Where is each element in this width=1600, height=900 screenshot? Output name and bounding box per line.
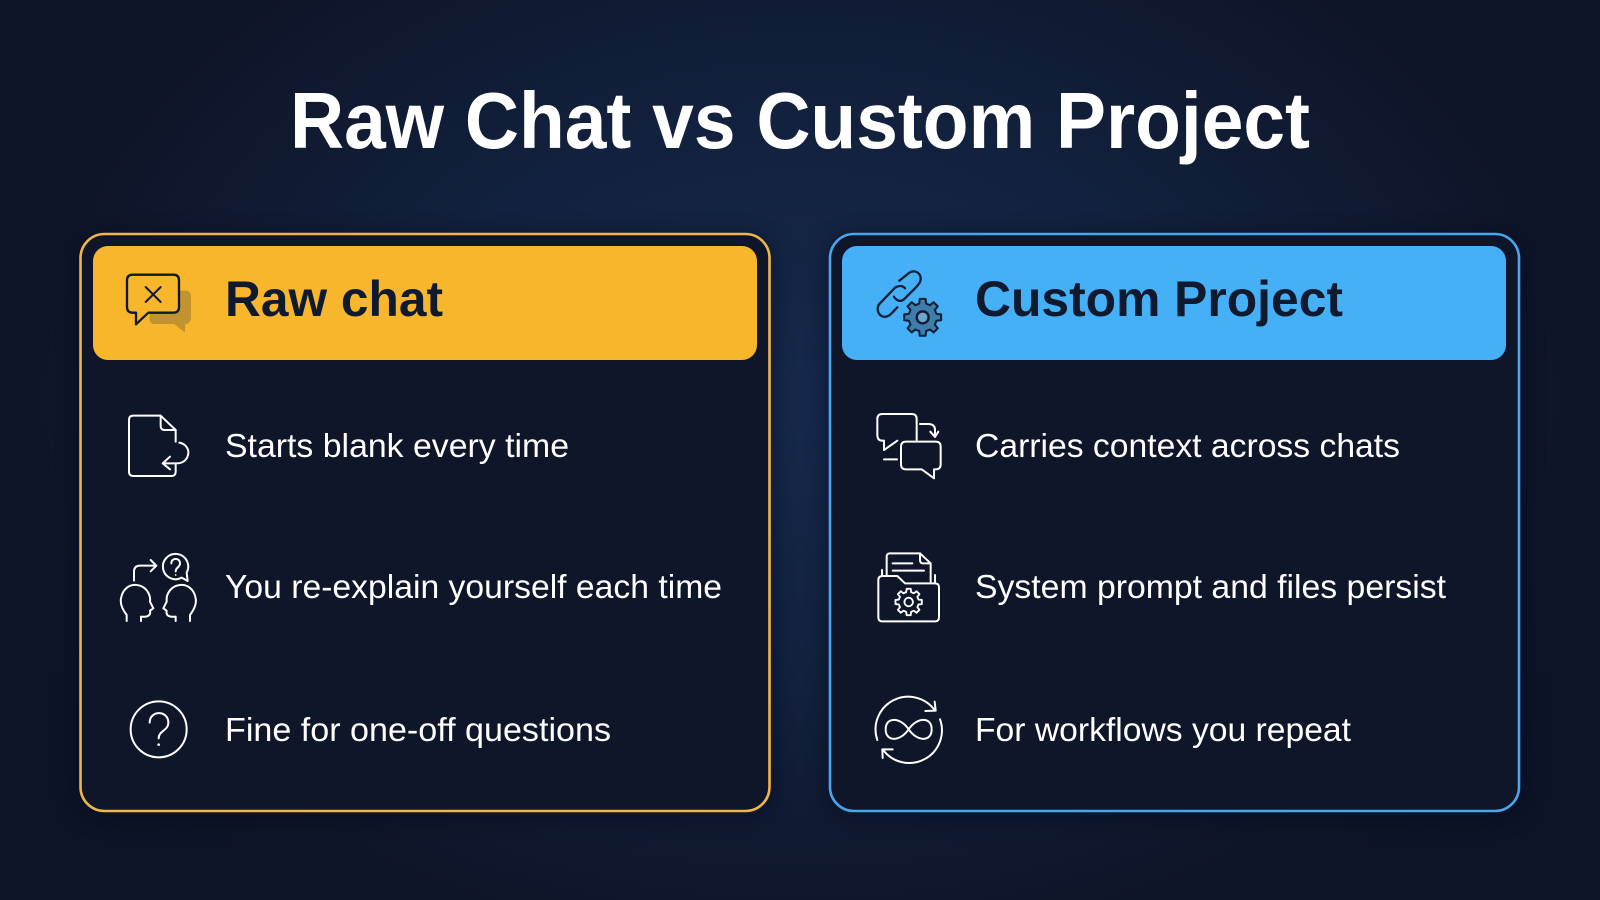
heading: custom project: Custom Project xyxy=(975,271,1343,327)
text: Carries context across chats xyxy=(975,427,1400,464)
text: You re-explain yourself each time xyxy=(225,568,722,605)
row: carries context xyxy=(877,414,1400,478)
icon: infinity loop with arrows xyxy=(876,697,942,763)
header: custom project xyxy=(842,246,1506,360)
header: raw chat xyxy=(93,246,757,360)
icon: exchanging chat bubbles xyxy=(877,414,941,478)
text: For workflows you repeat xyxy=(975,711,1351,748)
row: re-explain xyxy=(121,554,722,621)
heading: raw chat: Raw chat xyxy=(225,271,443,327)
row: starts blank xyxy=(129,416,569,476)
icon: chain link and gear xyxy=(878,271,941,336)
icon: folder with document and gear xyxy=(878,553,939,621)
text: Starts blank every time xyxy=(225,427,569,464)
title: Raw Chat vs Custom Project xyxy=(290,76,1310,165)
row: workflows xyxy=(876,697,1351,763)
icon: blank document xyxy=(129,416,188,476)
panel: custom project xyxy=(830,234,1520,815)
text: Fine for one-off questions xyxy=(225,711,611,748)
icon: chat bubble with x xyxy=(127,275,191,333)
panel: raw chat xyxy=(80,234,770,815)
row: system prompt xyxy=(878,553,1446,621)
icon: two heads with question xyxy=(121,554,196,621)
row: one-off xyxy=(131,701,611,757)
icon: question mark circle xyxy=(131,701,187,757)
text: System prompt and files persist xyxy=(975,568,1446,605)
